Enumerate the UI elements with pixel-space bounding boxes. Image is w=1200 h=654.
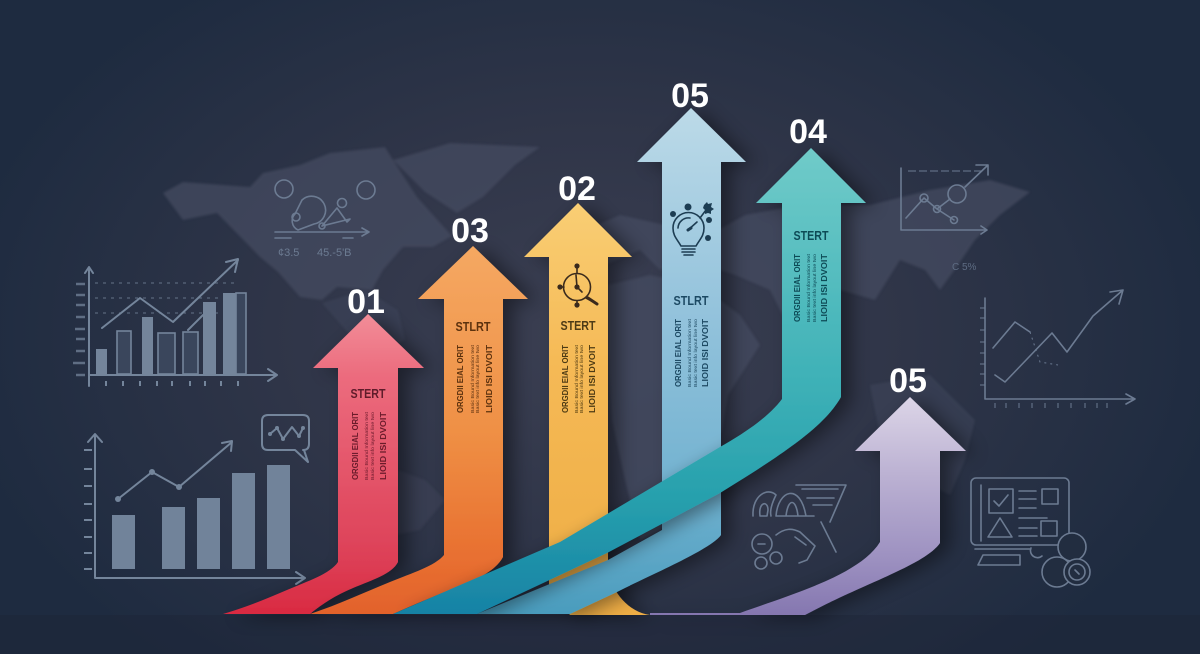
arrow 04 text: Basic Bound Information text (806, 253, 811, 322)
number 05 top: 05 (671, 77, 709, 115)
arrow 03 text (456, 319, 494, 413)
arrow 05 text (674, 293, 710, 387)
number 02: 02 (558, 170, 596, 208)
arrow 05 text: STLRT (674, 293, 709, 308)
icon: arches and notes doodle (752, 485, 846, 569)
number 01: 01 (347, 283, 385, 321)
arrow 05 text: ORGDII EIAL ORIT (674, 319, 683, 387)
small map label: C 5% (952, 262, 977, 273)
arrow 02 text (560, 318, 597, 413)
arrow 03 text: Basic text info layout line two (475, 344, 480, 413)
arrow 04 text: STERT (794, 228, 829, 243)
bottom dark strip (0, 615, 1200, 654)
arrow 01 red (223, 314, 424, 614)
icon: speech bubble chart (262, 415, 309, 462)
world map silhouette (163, 143, 1030, 540)
number 05 lower: 05 (889, 362, 927, 400)
arrow 04 text: Basic text info layout line two (812, 253, 817, 322)
chart: upper right network trend (901, 165, 988, 234)
arrow 03 text: Basic Bound Information text (470, 344, 475, 413)
arrow 01 text: ORGDII EIAL ORIT (351, 412, 360, 480)
arrow 02 yellow (524, 203, 650, 615)
arrow 02 text: Basic Bound Information text (574, 344, 579, 413)
arrow 05 text: Basic text info layout line two (693, 318, 698, 387)
chart: lower left bars and trend (84, 434, 305, 584)
number 03: 03 (451, 212, 489, 250)
chart: right line trend (980, 290, 1135, 408)
arrow 02 text: STERT (560, 318, 596, 333)
icon: clock and magnifier (558, 264, 597, 307)
arrow 01 text: LIOID ISI DVOIT (379, 412, 388, 480)
arrow 05 blue (477, 108, 746, 614)
arrow 04 text: ORGDII EIAL ORIT (793, 254, 802, 322)
icon: light bulb idea (670, 202, 714, 255)
arrow 03 orange (310, 246, 528, 614)
arrow 02 text: ORGDII EIAL ORIT (561, 345, 570, 413)
arrow 02 text: LIOID ISI DVOIT (588, 345, 597, 413)
arrow 04 text: LIOID ISI DVOIT (820, 254, 829, 322)
arrow 05 text: Basic Bound Information text (687, 318, 692, 387)
arrow 01 text: Basic Bound Information text (364, 411, 369, 480)
icon: map network diagram: 45.-5'B (317, 247, 352, 259)
icon: map network diagram (275, 180, 375, 259)
arrow 03 text: ORGDII EIAL ORIT (456, 345, 465, 413)
arrow 03 text: LIOID ISI DVOIT (485, 345, 494, 413)
arrow 04 teal (393, 148, 866, 614)
arrow 05 text: LIOID ISI DVOIT (701, 319, 710, 387)
arrow 01 text (350, 386, 388, 480)
arrow 01 text: STERT (350, 386, 386, 401)
number 04: 04 (789, 113, 827, 151)
chart: upper left bars and trend (73, 259, 277, 386)
arrow 05 lavender (650, 397, 966, 615)
icon: map network diagram: ¢3.5 (278, 247, 299, 259)
arrow 02 text: Basic text info layout line two (579, 344, 584, 413)
arrow 03 text: STLRT (456, 319, 491, 334)
arrow 04 text (793, 228, 829, 322)
arrow 01 text: Basic text info layout line two (370, 411, 375, 480)
icon: monitor with checklist and coins (971, 478, 1090, 587)
